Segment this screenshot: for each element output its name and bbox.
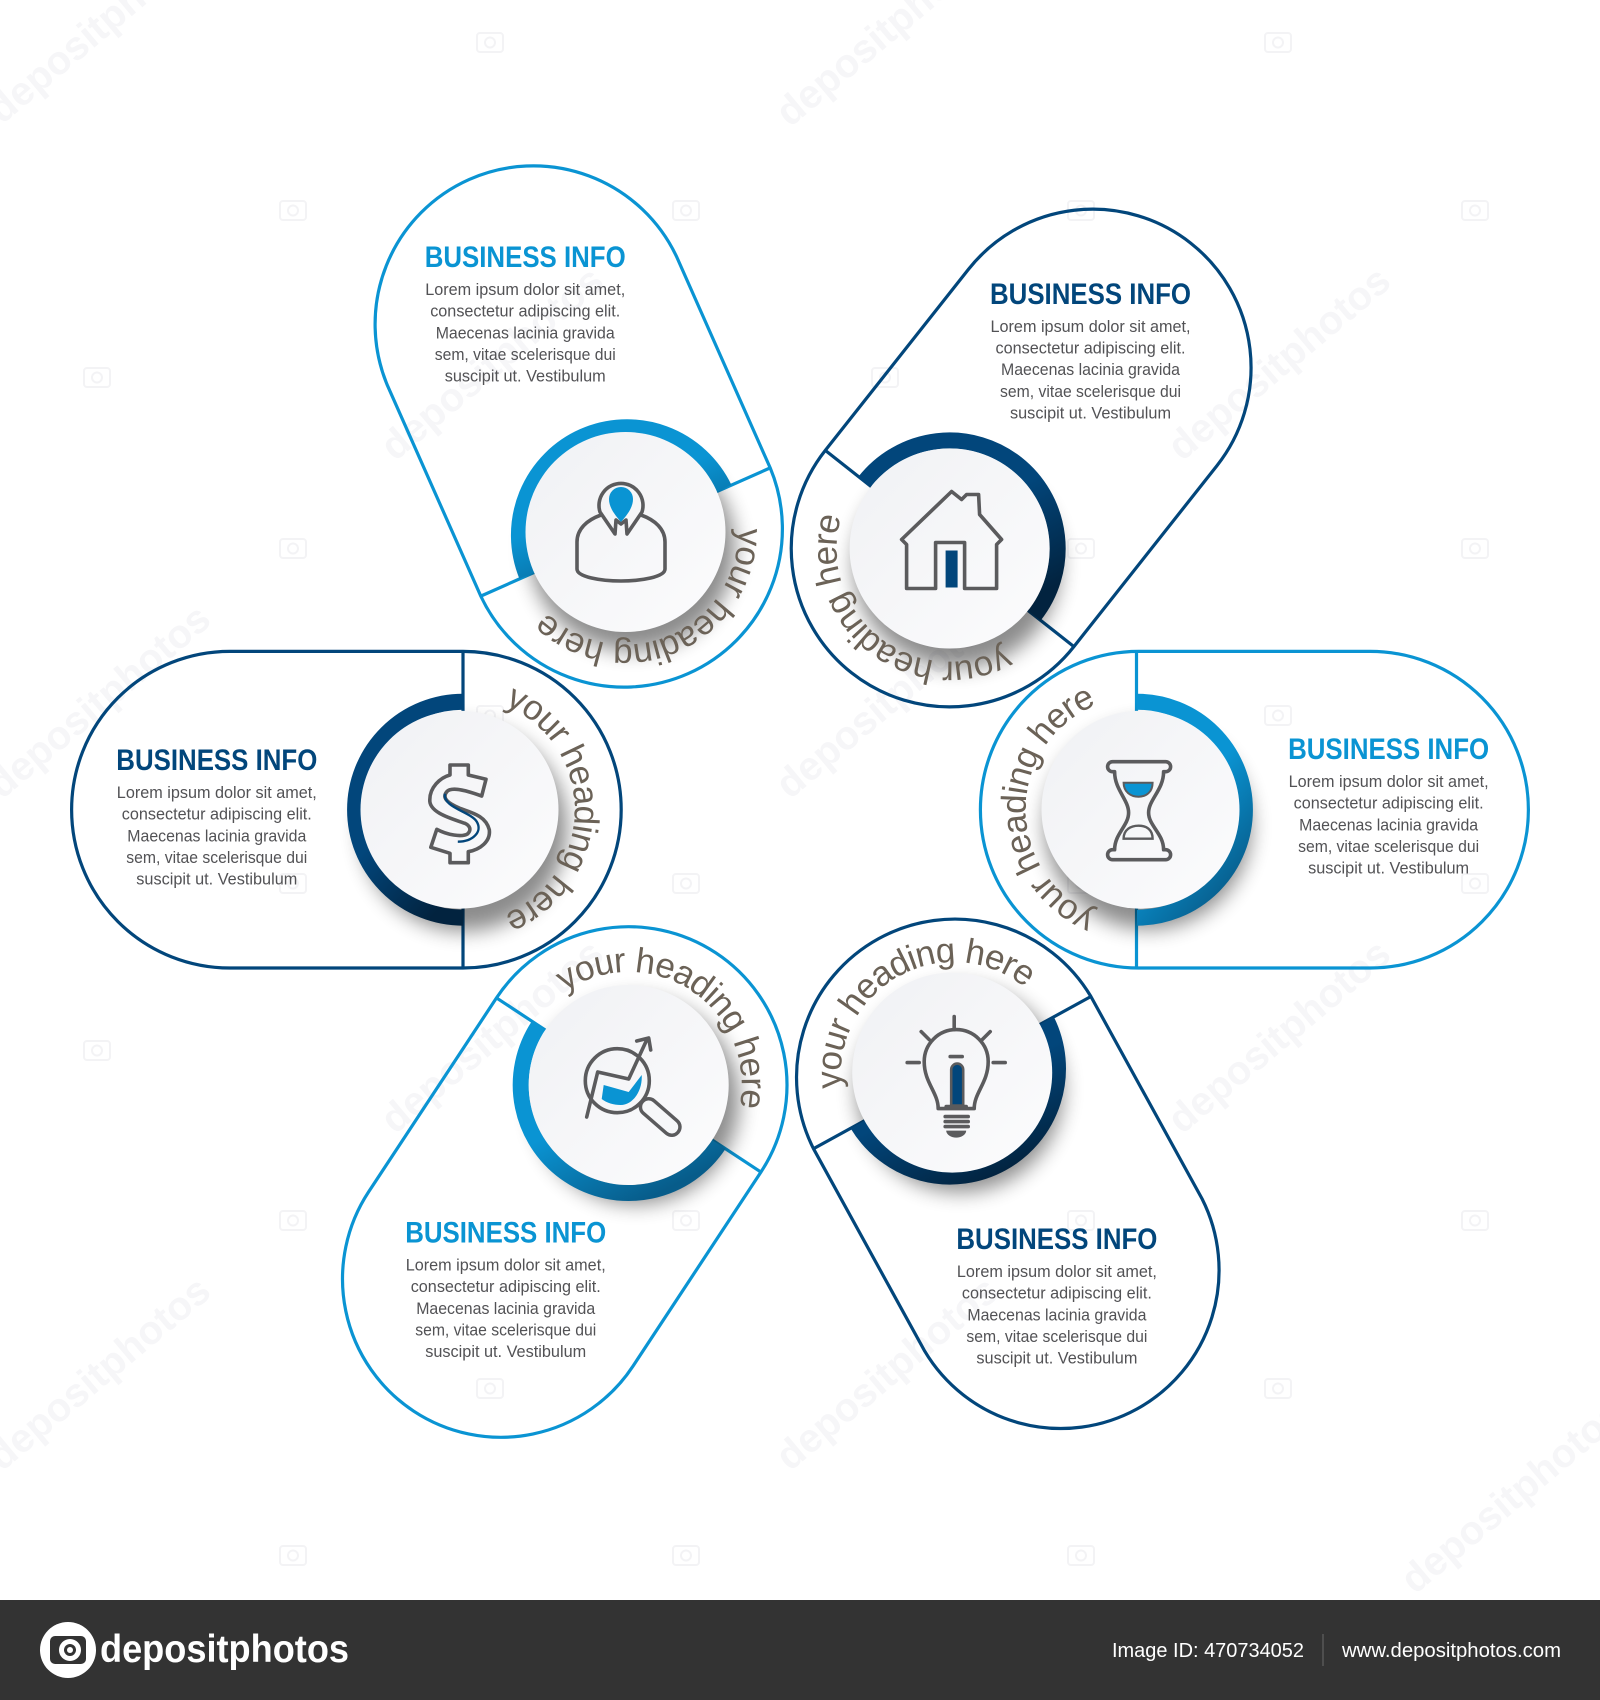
watermark: depositphotos bbox=[373, 258, 612, 469]
ring arc bbox=[355, 702, 463, 918]
ring arc bbox=[865, 440, 1058, 616]
text block: Lorem ipsum dolor sit amet, bbox=[425, 281, 625, 299]
text block: BUSINESS INFO bbox=[990, 278, 1191, 311]
ring shadow bbox=[361, 725, 567, 931]
text block bbox=[1288, 733, 1489, 878]
text block: Maecenas lacinia gravida bbox=[967, 1306, 1147, 1324]
watermark: depositphotos bbox=[768, 1268, 1007, 1479]
icon: footer camera logo bbox=[40, 1622, 96, 1678]
white disc bbox=[529, 985, 729, 1185]
text block: Lorem ipsum dolor sit amet, bbox=[957, 1263, 1157, 1281]
text block: sem, vitae scelerisque dui bbox=[1298, 838, 1479, 856]
text block: BUSINESS INFO bbox=[956, 1223, 1157, 1256]
icon: light bulb bbox=[907, 1017, 1005, 1138]
footer bar bbox=[0, 1600, 1600, 1700]
watermark: depositphotos bbox=[1160, 258, 1399, 469]
text block: Lorem ipsum dolor sit amet, bbox=[1289, 773, 1489, 791]
text block: suscipit ut. Vestibulum bbox=[1010, 404, 1171, 422]
text block: consectetur adipiscing elit. bbox=[122, 806, 312, 824]
icon: dollar bbox=[430, 765, 489, 863]
text block: suscipit ut. Vestibulum bbox=[136, 871, 297, 889]
capsule outline bbox=[343, 927, 787, 1437]
icon: magnifier chart bbox=[585, 1038, 672, 1127]
ring arc bbox=[519, 427, 724, 576]
text block: Maecenas lacinia gravida bbox=[1299, 816, 1479, 834]
text block bbox=[425, 241, 626, 386]
icon: hourglass bbox=[1108, 762, 1171, 860]
white disc bbox=[360, 711, 558, 909]
watermark: depositphotos bbox=[373, 931, 612, 1142]
panel: left dollar bbox=[70, 650, 623, 970]
text block: Maecenas lacinia gravida bbox=[436, 324, 615, 342]
divider bbox=[481, 468, 770, 596]
text block: suscipit ut. Vestibulum bbox=[1308, 860, 1469, 878]
footer separator bbox=[1322, 1634, 1324, 1666]
ring shadow bbox=[1045, 723, 1251, 929]
divider bbox=[814, 996, 1091, 1149]
text block bbox=[116, 744, 317, 889]
text block: BUSINESS INFO bbox=[405, 1216, 606, 1250]
text block: Lorem ipsum dolor sit amet, bbox=[990, 318, 1190, 336]
curved heading: your heading here bbox=[502, 688, 600, 928]
text block: Lorem ipsum dolor sit amet, bbox=[406, 1256, 606, 1274]
footer logo text: depositphotos bbox=[100, 1628, 349, 1671]
panel: right hourglass bbox=[978, 650, 1530, 970]
text block: sem, vitae scelerisque dui bbox=[966, 1328, 1147, 1346]
footer website: www.depositphotos.com bbox=[1341, 1640, 1561, 1662]
text block: BUSINESS INFO bbox=[1288, 733, 1489, 766]
divider bbox=[1135, 651, 1138, 968]
text block: Maecenas lacinia gravida bbox=[127, 827, 307, 845]
text block: BUSINESS INFO bbox=[116, 744, 317, 777]
footer image id: Image ID: 470734052 bbox=[1112, 1640, 1304, 1662]
divider bbox=[461, 651, 465, 968]
white disc bbox=[852, 973, 1052, 1173]
white disc bbox=[1042, 711, 1240, 909]
panel: bottom-right light bulb bbox=[794, 918, 1221, 1430]
text block: consectetur adipiscing elit. bbox=[430, 303, 620, 321]
panel: top-left location person bbox=[374, 164, 784, 689]
curved heading: your heading here bbox=[816, 516, 1014, 686]
text block: Maecenas lacinia gravida bbox=[1001, 361, 1181, 379]
text block: consectetur adipiscing elit. bbox=[411, 1278, 601, 1296]
ring shadow bbox=[529, 445, 735, 651]
capsule outline bbox=[791, 209, 1251, 707]
text block: consectetur adipiscing elit. bbox=[996, 339, 1186, 357]
curved heading: your heading here bbox=[556, 946, 761, 1108]
text block: consectetur adipiscing elit. bbox=[1294, 795, 1484, 813]
ring arc bbox=[521, 1026, 719, 1193]
ring shadow bbox=[854, 462, 1060, 668]
curved heading: your heading here bbox=[538, 528, 757, 667]
watermark: depositphotos bbox=[1160, 931, 1399, 1142]
ring arc bbox=[1137, 702, 1245, 918]
text block: suscipit ut. Vestibulum bbox=[445, 368, 606, 386]
panel: top-right house bbox=[790, 208, 1253, 708]
capsule outline bbox=[375, 166, 782, 687]
text block: BUSINESS INFO bbox=[425, 241, 626, 274]
text block: Lorem ipsum dolor sit amet, bbox=[117, 784, 317, 802]
text block: sem, vitae scelerisque dui bbox=[415, 1322, 596, 1340]
text block: sem, vitae scelerisque dui bbox=[435, 346, 616, 364]
text block: sem, vitae scelerisque dui bbox=[1000, 383, 1181, 401]
text block bbox=[990, 278, 1191, 422]
capsule outline bbox=[797, 919, 1219, 1428]
text block: sem, vitae scelerisque dui bbox=[126, 849, 307, 867]
watermark: depositphotos bbox=[768, 596, 1007, 807]
icon: location person bbox=[577, 483, 665, 581]
divider bbox=[496, 998, 761, 1172]
panel: bottom-left magnifier bbox=[340, 925, 789, 1439]
text block: consectetur adipiscing elit. bbox=[962, 1285, 1152, 1303]
ring arc bbox=[858, 1021, 1058, 1177]
ring shadow bbox=[857, 986, 1063, 1192]
text block bbox=[405, 1216, 606, 1361]
curved heading: your heading here bbox=[1000, 690, 1098, 932]
text block: suscipit ut. Vestibulum bbox=[425, 1343, 586, 1361]
text block: Maecenas lacinia gravida bbox=[416, 1300, 596, 1318]
text block bbox=[956, 1223, 1157, 1368]
white disc bbox=[850, 448, 1050, 648]
capsule outline bbox=[72, 651, 621, 968]
ring shadow bbox=[533, 998, 739, 1204]
text block: suscipit ut. Vestibulum bbox=[976, 1350, 1137, 1368]
white disc bbox=[526, 432, 726, 632]
divider bbox=[825, 450, 1074, 647]
capsule outline bbox=[980, 651, 1528, 968]
icon: house bbox=[902, 492, 1002, 588]
curved heading: your heading here bbox=[822, 938, 1032, 1089]
